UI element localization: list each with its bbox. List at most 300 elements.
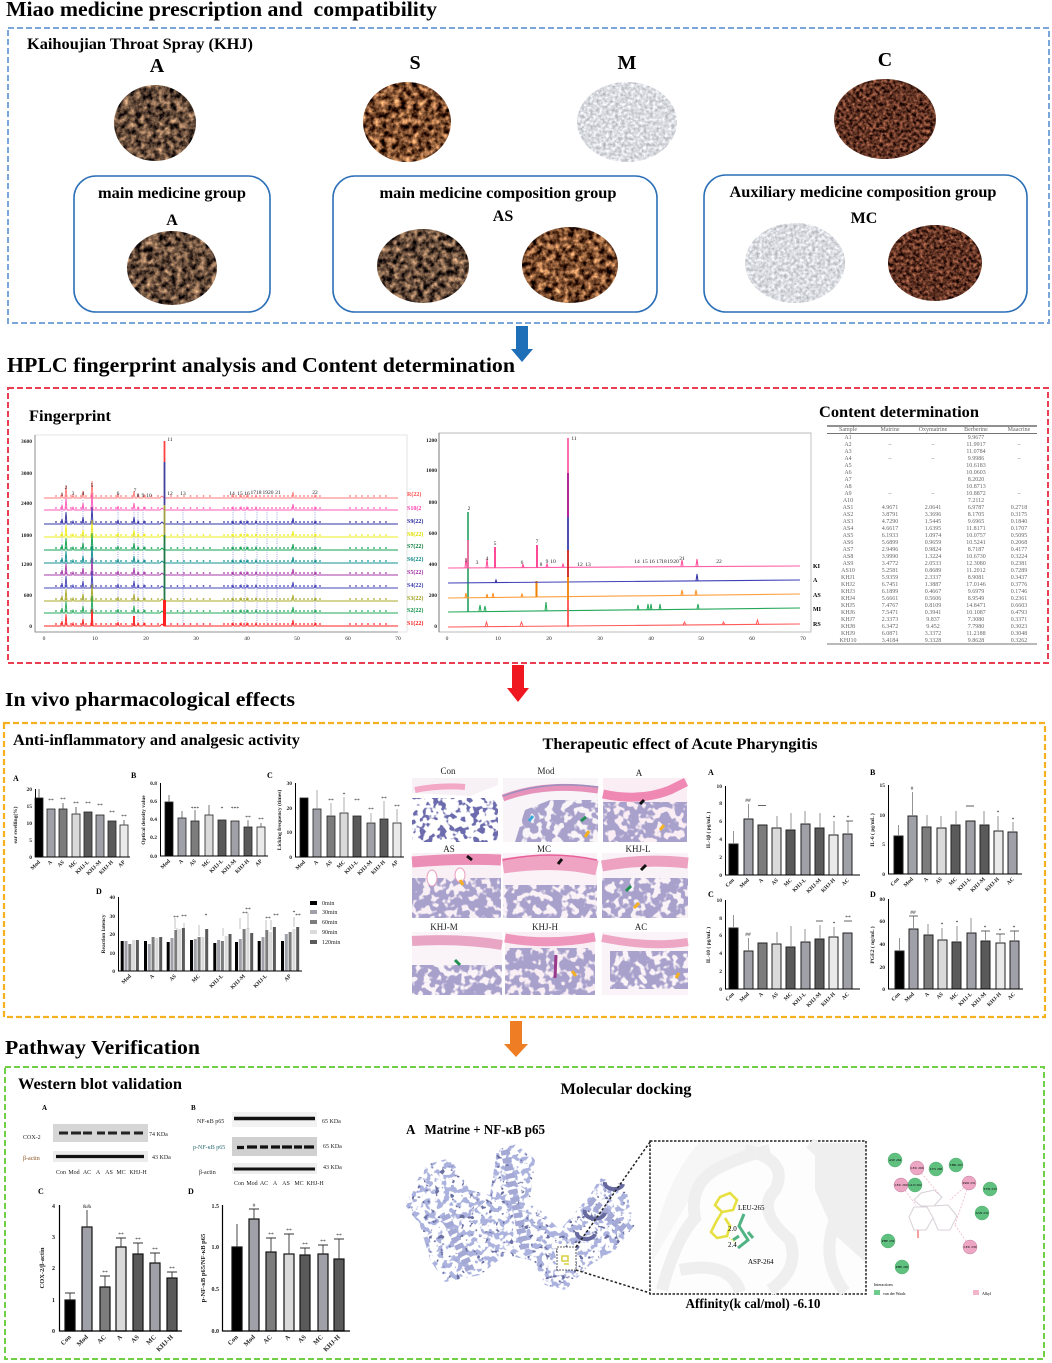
table: content determination: Berberine bbox=[964, 427, 988, 433]
chart: fingerprint chromatograms S1-S10: 0 bbox=[29, 624, 32, 630]
bar chart: IL-10: ** bbox=[845, 915, 851, 921]
bar chart: COX-2/β-actin: Mod bbox=[76, 1334, 90, 1348]
table: content determination: 7.5471 bbox=[882, 610, 898, 616]
table: content determination: 3.4184 bbox=[882, 638, 898, 644]
bar chart: C licking frequency: KHJ-L bbox=[344, 859, 360, 876]
table: content determination: 10.1087 bbox=[966, 610, 986, 616]
chart: herb group chromatograms: 60 bbox=[749, 636, 755, 642]
bar chart: C licking frequency: ** bbox=[328, 798, 334, 804]
histology: A: A bbox=[636, 768, 643, 778]
bar chart: p-NF-κB p65/NF-κB p65: p-NF-κB p65/NF-κB p65 bbox=[200, 1233, 207, 1302]
bar chart: C licking frequency: A bbox=[313, 860, 320, 867]
table: content determination: 1.5445 bbox=[925, 519, 941, 525]
bar chart: IL-10: 6 bbox=[719, 933, 722, 939]
table: content determination: A6 bbox=[844, 470, 852, 476]
bar chart: p-NF-κB p65/NF-κB p65: Con bbox=[227, 1334, 240, 1347]
legend: interaction types bbox=[874, 1282, 992, 1296]
table: content determination: 3.9990 bbox=[882, 554, 898, 560]
table: content determination: 9.452 bbox=[926, 624, 940, 630]
table: content determination: 3.8791 bbox=[882, 512, 898, 518]
bar chart: IL-6: # bbox=[911, 786, 914, 792]
bar chart: IL-6: KHJ-M bbox=[970, 876, 987, 894]
bar chart: IL-10: AC bbox=[841, 992, 851, 1001]
histology: Mod bbox=[503, 766, 598, 842]
bar chart: IL-1β: A bbox=[758, 878, 765, 885]
chart: fingerprint chromatograms S1-S10: 1200 bbox=[21, 562, 32, 568]
table: content determination: A1 bbox=[844, 435, 852, 441]
bar chart: PGE2: * bbox=[1013, 925, 1016, 931]
bar chart: IL-1β: * bbox=[847, 815, 850, 821]
table: content determination: 0.3371 bbox=[1011, 617, 1027, 623]
bar chart: A ear swelling: ** bbox=[48, 798, 54, 804]
chart: fingerprint chromatograms S1-S10: S9(22) bbox=[407, 518, 423, 525]
bar chart: D reaction latency: ** bbox=[245, 907, 251, 913]
2D interaction diagram: ASN 232 bbox=[975, 1211, 989, 1215]
table: content determination: 6.9787 bbox=[968, 505, 984, 511]
chart: fingerprint chromatograms S1-S10: 1800 bbox=[21, 533, 32, 539]
bar chart: D reaction latency bbox=[96, 887, 340, 991]
table: content determination: 0.3262 bbox=[1011, 638, 1027, 644]
bar chart: B optical density: KHJ-M bbox=[221, 858, 238, 876]
histology: Con: Con bbox=[440, 766, 456, 776]
bar chart: C licking frequency: * bbox=[343, 792, 346, 798]
bar chart: C licking frequency: 10 bbox=[286, 830, 292, 836]
chart: fingerprint chromatograms S1-S10: 15 bbox=[237, 491, 243, 497]
docking inset: LEU-265 ASP-264: ASP-264 bbox=[748, 1258, 774, 1266]
bar chart: A ear swelling: 10 bbox=[26, 821, 32, 827]
table: content determination: 10.6183 bbox=[966, 463, 986, 469]
bar chart: D reaction latency: AP bbox=[283, 973, 293, 983]
histology: KHJ-H: KHJ-H bbox=[532, 922, 558, 932]
bar chart: IL-1β: 8 bbox=[719, 801, 722, 807]
western blot A: COX-2: 43 KDa bbox=[152, 1155, 171, 1161]
bar chart: IL-1β: A bbox=[708, 768, 714, 777]
2D interaction diagram: LEU 230 bbox=[964, 1245, 977, 1249]
table: content determination: AS2 bbox=[843, 512, 853, 518]
chart: herb group chromatograms: 12 bbox=[577, 562, 583, 568]
heading: therapeutic effect: Therapeutic effect of Acute Pharyngitis bbox=[542, 736, 818, 753]
table: content determination: A9 bbox=[844, 491, 852, 497]
chart: herb group chromatograms: 0 bbox=[446, 636, 449, 642]
table: content determination: A4 bbox=[844, 456, 852, 462]
chart: herb group chromatograms: KI bbox=[813, 564, 821, 570]
western blot A: COX-2: β-actin bbox=[23, 1156, 40, 1162]
chart: herb group chromatograms: 70 bbox=[800, 636, 806, 642]
heading: Molecular docking: Molecular docking bbox=[560, 1081, 692, 1098]
bar chart: B optical density: B bbox=[131, 771, 137, 780]
table: content determination: 6.3472 bbox=[882, 624, 898, 630]
bar chart: PGE2: 60 bbox=[880, 919, 885, 925]
table: content determination: 0.8689 bbox=[925, 568, 941, 574]
chart: fingerprint chromatograms S1-S10: 40 bbox=[244, 636, 250, 642]
table: content determination: 0.1840 bbox=[1011, 519, 1027, 525]
bar chart: IL-10: MC bbox=[783, 992, 794, 1002]
table: content determination: 1.0974 bbox=[925, 533, 941, 539]
table: content determination: A5 bbox=[844, 463, 852, 469]
western blot A: COX-2: COX-2 bbox=[23, 1135, 41, 1141]
bar chart: IL-6: * bbox=[1012, 817, 1015, 823]
bar chart: A ear swelling: A bbox=[13, 774, 19, 783]
histology: KHJ-L: KHJ-L bbox=[626, 844, 650, 854]
bar chart: COX-2/β-actin bbox=[38, 1187, 182, 1353]
table: content determination: 8.9549 bbox=[968, 596, 984, 602]
western blot B: NF-κB p65: MC bbox=[294, 1181, 304, 1187]
chart: herb group chromatograms: 1 bbox=[465, 558, 468, 564]
table: content determination: KHJ1 bbox=[841, 575, 855, 581]
heading: HPLC fingerprint analysis: HPLC fingerprint analysis and Content determination bbox=[7, 353, 515, 377]
bar chart: D reaction latency: 40 bbox=[110, 895, 115, 901]
bar chart: A ear swelling: AS bbox=[57, 860, 66, 869]
bar chart: B optical density: *** bbox=[191, 806, 199, 812]
bar chart: IL-10: Mod bbox=[739, 992, 751, 1004]
bar chart: A ear swelling: ** bbox=[60, 797, 66, 803]
legend: reaction latency times: 60min bbox=[322, 920, 337, 926]
table: content determination: A8 bbox=[844, 484, 852, 490]
western blot A: COX-2: A bbox=[42, 1104, 47, 1112]
bar chart: COX-2/β-actin: ** bbox=[152, 1247, 158, 1253]
bar chart: p-NF-κB p65/NF-κB p65: D bbox=[188, 1187, 194, 1196]
chart: herb group chromatograms: 14 bbox=[634, 559, 640, 565]
chart: fingerprint chromatograms S1-S10: 70 bbox=[395, 636, 401, 642]
chart: fingerprint chromatograms S1-S10: 4 bbox=[82, 491, 85, 497]
table: content determination: – bbox=[888, 491, 892, 497]
chart: fingerprint chromatograms S1-S10: S1(22) bbox=[407, 620, 423, 627]
table: content determination: AS7 bbox=[843, 547, 853, 553]
table: content determination: 4.9671 bbox=[882, 505, 898, 511]
bar chart: C licking frequency: C bbox=[267, 771, 273, 780]
bar chart: p-NF-κB p65/NF-κB p65: 1.5 bbox=[212, 1204, 219, 1210]
table: content determination: 0.9659 bbox=[925, 540, 941, 546]
bar chart: COX-2/β-actin: C bbox=[38, 1187, 44, 1196]
table: content determination: 1.6395 bbox=[925, 526, 941, 532]
bar chart: IL-1β bbox=[705, 768, 860, 895]
western blot A: COX-2 bbox=[23, 1104, 171, 1176]
table: content determination: 7.3080 bbox=[968, 617, 984, 623]
docking inset: LEU-265 ASP-264: 2.0 bbox=[728, 1225, 737, 1233]
table: content determination: – bbox=[930, 491, 936, 497]
table: content determination: Oxymatrine bbox=[919, 427, 948, 433]
panel: in vivo pharmacological effects bbox=[4, 723, 1045, 1017]
table: content determination: A10 bbox=[843, 498, 853, 504]
table: content determination: 5.9359 bbox=[882, 575, 898, 581]
chart: herb group chromatograms: 22 bbox=[716, 559, 722, 565]
histology: KHJ-H bbox=[505, 922, 595, 995]
bar chart: IL-10: KHJ-M bbox=[806, 991, 823, 1009]
herb A bbox=[114, 55, 196, 161]
table: content determination: 2.0533 bbox=[925, 561, 941, 567]
arrow: orange down bbox=[504, 1021, 528, 1057]
chart: herb group chromatograms: 2 bbox=[468, 506, 471, 512]
table: content determination: 0.3224 bbox=[1011, 554, 1027, 560]
chart: herb group chromatograms: A bbox=[813, 578, 818, 584]
table: content determination: 8.7187 bbox=[968, 547, 984, 553]
histology: AC bbox=[602, 922, 688, 995]
2D interaction diagram: ASP 264 bbox=[889, 1158, 901, 1162]
2D interaction diagram: LYS 268 bbox=[930, 1167, 942, 1171]
group: main medicine composition group bbox=[333, 176, 657, 312]
bar chart: A ear swelling: AP bbox=[117, 859, 127, 869]
bar chart: p-NF-κB p65/NF-κB p65: 0.5 bbox=[212, 1287, 219, 1293]
bar chart: IL-10: KHJ-L bbox=[792, 991, 808, 1008]
western blot A: COX-2: AC bbox=[83, 1170, 91, 1176]
bar chart: PGE2: KHJ-M bbox=[971, 991, 988, 1009]
bar chart: IL-10: 4 bbox=[719, 951, 722, 957]
table: content determination: 0.5095 bbox=[1011, 533, 1027, 539]
bar chart: PGE2 bbox=[869, 890, 1023, 1009]
bar chart: p-NF-κB p65/NF-κB p65: ** bbox=[268, 1232, 274, 1238]
table: content determination: 9.9677 bbox=[968, 435, 984, 441]
table: content determination: 5.6899 bbox=[882, 540, 898, 546]
bar chart: C licking frequency: ** bbox=[354, 798, 360, 804]
bar chart: p-NF-κB p65/NF-κB p65: MC bbox=[312, 1334, 325, 1346]
table: content determination: 0.4177 bbox=[1011, 547, 1027, 553]
bar chart: PGE2: AS bbox=[936, 992, 945, 1001]
chart: fingerprint chromatograms S1-S10: 3000 bbox=[21, 471, 32, 477]
bar chart: IL-6: KHJ-H bbox=[984, 876, 1001, 893]
group: main medicine composition group: main medicine composition group bbox=[380, 185, 616, 202]
group: main medicine composition group: AS bbox=[493, 208, 513, 225]
bar chart: IL-1β: KHJ-H bbox=[820, 877, 837, 894]
caption: Affinity: Affinity(k cal/mol) -6.10 bbox=[686, 1297, 820, 1312]
bar chart: D reaction latency: ** bbox=[273, 913, 279, 919]
bar chart: p-NF-κB p65/NF-κB p65: A bbox=[284, 1334, 292, 1342]
chart: fingerprint chromatograms S1-S10: 21 bbox=[275, 490, 281, 496]
chart: fingerprint chromatograms S1-S10: 1 bbox=[61, 492, 64, 498]
chart: herb group chromatograms: 40 bbox=[648, 636, 654, 642]
histology: KHJ-M: KHJ-M bbox=[430, 922, 458, 932]
histology: A bbox=[603, 768, 687, 842]
table: content determination: 0.5606 bbox=[925, 596, 941, 602]
table: content determination: 0.2718 bbox=[1011, 505, 1027, 511]
bar chart: B optical density: KHJ-L bbox=[209, 858, 225, 875]
bar chart: IL-6: IL-6 ( pg/mL ) bbox=[869, 813, 876, 847]
chart: fingerprint chromatograms S1-S10: R(22) bbox=[407, 491, 421, 498]
bar chart: D reaction latency: 0 bbox=[112, 969, 115, 975]
table: content determination: 0.3437 bbox=[1011, 575, 1027, 581]
bar chart: C licking frequency: ** bbox=[394, 804, 400, 810]
chart: herb group chromatograms: 30 bbox=[597, 636, 603, 642]
chart: herb group chromatograms: 10 bbox=[495, 636, 501, 642]
bar chart: IL-10: 10 bbox=[716, 898, 722, 904]
bar chart: IL-6: MC bbox=[948, 877, 959, 887]
bar chart: IL-10 bbox=[705, 890, 860, 1009]
table: content determination: KHJ2 bbox=[841, 582, 855, 588]
bar chart: IL-1β: 10 bbox=[716, 784, 722, 790]
chart: fingerprint chromatograms S1-S10: 16 bbox=[244, 491, 250, 497]
table: content determination: 0.3048 bbox=[1011, 631, 1027, 637]
chart: fingerprint chromatograms S1-S10: 1920 bbox=[262, 490, 274, 496]
herb S bbox=[363, 52, 451, 162]
bar chart: COX-2/β-actin: ** bbox=[169, 1266, 175, 1272]
bar chart: PGE2: * bbox=[956, 920, 959, 926]
chart: herb group chromatograms: 3 bbox=[476, 560, 479, 566]
table: content determination: 10.0757 bbox=[966, 533, 986, 539]
bar chart: D reaction latency: Mod bbox=[121, 974, 133, 986]
western blot B: NF-κB p65: 65 KDa bbox=[323, 1144, 342, 1150]
table: content determination: AS6 bbox=[843, 540, 853, 546]
western blot B: NF-κB p65: p-NF-κB p65 bbox=[193, 1145, 225, 1151]
table: content determination: 11.9917 bbox=[966, 442, 986, 448]
panel: pathway verification bbox=[5, 1067, 1044, 1359]
protein structure bbox=[405, 1143, 635, 1290]
bar chart: C licking frequency: ** bbox=[381, 796, 387, 802]
table: content determination: 17.0146 bbox=[966, 582, 986, 588]
chart: fingerprint chromatograms S1-S10: 60 bbox=[345, 636, 351, 642]
table: content determination: Matrine bbox=[880, 427, 900, 433]
table: content determination: Sample bbox=[839, 427, 857, 433]
2D interaction diagram: LEU 269 bbox=[895, 1183, 908, 1187]
bar chart: D reaction latency: AS bbox=[169, 974, 178, 983]
bar chart: D reaction latency: KHJ-L bbox=[253, 973, 269, 990]
chart: fingerprint chromatograms S1-S10: S3(22) bbox=[407, 595, 423, 602]
bar chart: IL-6 bbox=[869, 768, 1022, 894]
table: content determination: 9.3328 bbox=[925, 638, 941, 644]
table: content determination: – bbox=[888, 442, 892, 448]
bar chart: IL-10: 0 bbox=[719, 987, 722, 993]
bar chart: C licking frequency: 20 bbox=[286, 806, 292, 812]
table: content determination: 10.5241 bbox=[966, 540, 986, 546]
bar chart: A ear swelling: KHJ-L bbox=[75, 859, 91, 876]
table: content determination: KHJ7 bbox=[841, 617, 855, 623]
table: content determination: 10.8713 bbox=[966, 484, 986, 490]
herb S: S bbox=[409, 52, 421, 74]
bar chart: COX-2/β-actin: COX-2/β-actin bbox=[39, 1247, 46, 1288]
table: content determination: 10.0603 bbox=[966, 470, 986, 476]
western blot A: COX-2: Mod bbox=[68, 1170, 80, 1176]
bar chart: A ear swelling: 5 bbox=[29, 838, 32, 844]
table: content determination: KHJ6 bbox=[841, 610, 855, 616]
bar chart: A ear swelling: KHJ-H bbox=[98, 859, 115, 876]
table: content determination: 4.7290 bbox=[882, 519, 898, 525]
herb A: A bbox=[150, 55, 165, 77]
table: content determination: A2 bbox=[844, 442, 852, 448]
bar chart: B optical density: *** bbox=[231, 806, 239, 812]
histology: Mod: Mod bbox=[537, 766, 555, 776]
bar chart: B optical density bbox=[131, 771, 268, 876]
bar chart: COX-2/β-actin: 3 bbox=[52, 1235, 55, 1241]
herb M bbox=[577, 52, 677, 162]
chart: fingerprint chromatograms S1-S10: 5 bbox=[91, 483, 94, 489]
bar chart: B optical density: 0.8 bbox=[150, 781, 157, 787]
bar chart: IL-6: 5 bbox=[882, 842, 885, 848]
group: main medicine group bbox=[74, 176, 270, 312]
bar chart: B optical density: * bbox=[221, 806, 224, 812]
western blot B: NF-κB p65 bbox=[191, 1104, 342, 1187]
chart: fingerprint chromatograms S1-S10: S4(22) bbox=[407, 582, 423, 589]
chart: herb group chromatograms: 4 bbox=[486, 556, 489, 562]
docking inset: LEU-265 ASP-264: 2.4 bbox=[728, 1241, 737, 1249]
heading: In vivo pharmacological effects: In vivo pharmacological effects bbox=[5, 689, 295, 711]
bar chart: B optical density: AP bbox=[254, 858, 264, 868]
western blot A: COX-2: MC bbox=[116, 1170, 126, 1176]
bar chart: B optical density: Optical density value bbox=[141, 795, 147, 845]
table: content determination: 2.3337 bbox=[925, 575, 941, 581]
table: content determination: KHJ4 bbox=[841, 596, 855, 602]
bar chart: PGE2: D bbox=[870, 890, 876, 899]
bar chart: A ear swelling: KHJ-M bbox=[86, 859, 103, 877]
bar chart: C licking frequency: KHJ-H bbox=[370, 859, 387, 876]
bar chart: p-NF-κB p65/NF-κB p65: ** bbox=[336, 1233, 342, 1239]
bar chart: p-NF-κB p65/NF-κB p65: ** bbox=[320, 1239, 326, 1245]
table: content determination: AS10 bbox=[841, 568, 855, 574]
bar chart: IL-6: 10 bbox=[880, 813, 885, 819]
chart: fingerprint chromatograms S1-S10: 11 bbox=[167, 437, 173, 443]
western blot B: NF-κB p65: A bbox=[273, 1181, 278, 1187]
chart: fingerprint chromatograms S1-S10: 600 bbox=[24, 593, 32, 599]
chart: fingerprint chromatograms S1-S10: 0 bbox=[43, 636, 46, 642]
table: content determination: 9.6979 bbox=[968, 589, 984, 595]
table: content determination: 6.1899 bbox=[882, 589, 898, 595]
bar chart: IL-10: 2 bbox=[719, 969, 722, 975]
chart: fingerprint chromatograms S1-S10: 6 bbox=[117, 491, 120, 497]
table: content determination: 6.7451 bbox=[882, 582, 898, 588]
table: content determination: 0.2361 bbox=[1011, 596, 1027, 602]
bar chart: C licking frequency: 0 bbox=[289, 855, 292, 861]
panel: Kaihoujian Throat Spray composition bbox=[8, 28, 1049, 323]
bar chart: IL-10: AS bbox=[771, 992, 780, 1001]
chart: fingerprint chromatograms S1-S10: 10 bbox=[146, 493, 152, 499]
table: content determination: AS1 bbox=[843, 505, 853, 511]
bar chart: PGE2: 40 bbox=[880, 942, 885, 948]
bar chart: COX-2/β-actin: 2 bbox=[52, 1266, 55, 1272]
chart: herb group chromatograms: 200 bbox=[429, 593, 437, 599]
chart: fingerprint chromatograms S1-S10: 3600 bbox=[21, 439, 32, 445]
bar chart: D reaction latency: KHJ-L bbox=[209, 973, 225, 990]
histology: KHJ-L bbox=[602, 844, 688, 918]
chart: fingerprint chromatograms S1-S10: 22 bbox=[312, 490, 318, 496]
2D interaction diagram: THR 265 bbox=[949, 1163, 963, 1167]
western blot B: NF-κB p65: AS bbox=[282, 1181, 290, 1187]
western blot A: COX-2: Con bbox=[56, 1170, 66, 1176]
bar chart: PGE2: 20 bbox=[880, 965, 885, 971]
bar chart: COX-2/β-actin: AC bbox=[96, 1334, 108, 1345]
table: content determination: 0.3776 bbox=[1011, 582, 1027, 588]
table: content determination: 11.2188 bbox=[966, 631, 986, 637]
chart: herb group chromatograms: 1200 bbox=[426, 438, 437, 444]
bar chart: PGE2: * bbox=[984, 925, 987, 931]
bar chart: C licking frequency: KHJ-M bbox=[357, 859, 374, 877]
docking inset: LEU-265 ASP-264: LEU-265 bbox=[738, 1204, 765, 1212]
chart: fingerprint chromatograms S1-S10: 30 bbox=[193, 636, 199, 642]
bar chart: p-NF-κB p65/NF-κB p65: 1.0 bbox=[212, 1245, 219, 1251]
bar chart: A ear swelling: A bbox=[47, 860, 54, 867]
chart: herb group chromatograms: MI bbox=[813, 607, 822, 613]
chart: herb group chromatograms: 10 bbox=[550, 559, 556, 565]
bar chart: A ear swelling: ** bbox=[85, 801, 91, 807]
bar chart: PGE2: Con bbox=[891, 992, 902, 1003]
bar chart: A ear swelling: 20 bbox=[26, 787, 32, 793]
western blot B: NF-κB p65: AC bbox=[260, 1181, 268, 1187]
bar chart: B optical density: 0.4 bbox=[150, 817, 157, 823]
chart: herb group chromatograms: 21 bbox=[679, 556, 685, 562]
histology: AC: AC bbox=[635, 922, 647, 932]
bar chart: PGE2: PGE2 ( ng/mL ) bbox=[869, 926, 876, 964]
bar chart: D reaction latency: MC bbox=[191, 974, 202, 984]
bar chart: B optical density: Mod bbox=[160, 859, 172, 871]
legend: reaction latency times: 90min bbox=[322, 930, 337, 936]
bar chart: IL-1β: 4 bbox=[719, 837, 722, 843]
bar chart: A ear swelling: ** bbox=[97, 803, 103, 809]
bar chart: IL-10: KHJ-H bbox=[820, 991, 837, 1008]
table: content determination: 10.6730 bbox=[966, 554, 986, 560]
table: content determination: 4.6617 bbox=[882, 526, 898, 532]
bar chart: IL-6: KHJ-L bbox=[957, 876, 973, 893]
table: content determination: 9.6965 bbox=[968, 519, 984, 525]
bar chart: C licking frequency bbox=[267, 771, 404, 877]
bar chart: A ear swelling bbox=[12, 774, 130, 877]
chart: fingerprint chromatograms S1-S10: 12 bbox=[167, 491, 173, 497]
bar chart: D reaction latency: 10 bbox=[110, 951, 115, 957]
